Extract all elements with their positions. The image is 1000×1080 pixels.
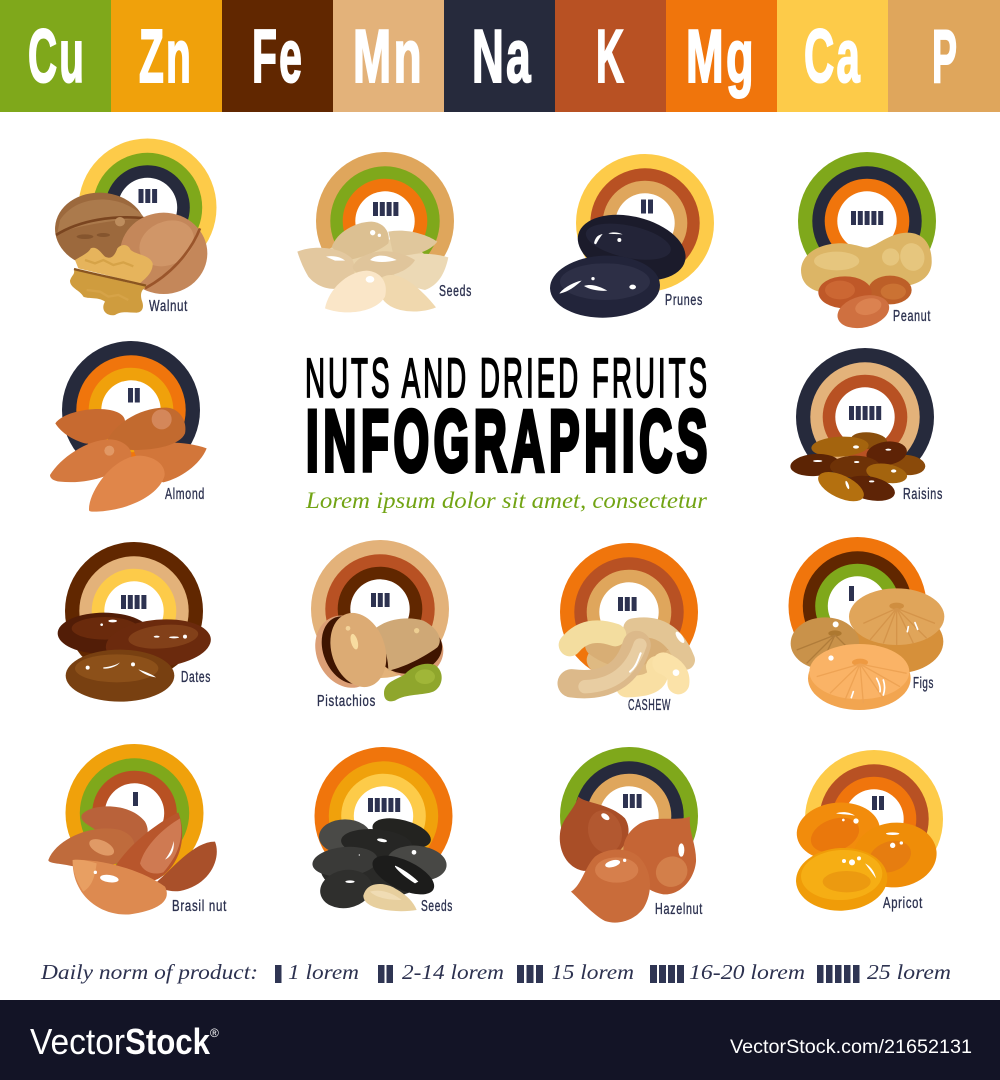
legend item: 16-20 lorem: 16-20 lorem — [689, 960, 805, 984]
daily norm bars: seeds — [373, 202, 398, 216]
label: pistachios: Pistachios — [317, 693, 376, 710]
element: Zn — [111, 0, 222, 112]
daily norm bars: sunflower seeds — [368, 798, 400, 812]
panel: almond — [50, 341, 207, 512]
daily norm bars: raisins — [849, 406, 881, 420]
panel: raisins — [790, 348, 943, 507]
icon: dates — [58, 613, 213, 702]
icon: sunflower seeds — [311, 813, 448, 912]
label: seeds: Seeds — [421, 898, 453, 915]
element: Ca — [777, 0, 888, 112]
daily norm bars: dates — [121, 595, 146, 609]
panel: prunes — [549, 154, 714, 320]
rings: raisins — [796, 348, 934, 486]
daily norm bars: walnut — [138, 189, 157, 203]
rings: cashew — [560, 543, 698, 681]
daily norm bars: cashew — [618, 597, 637, 611]
element: K — [555, 0, 666, 112]
icon: pistachios — [304, 605, 446, 701]
label: apricot: Apricot — [883, 895, 923, 912]
rings: brasil nut — [66, 744, 204, 882]
rings: walnut — [78, 138, 216, 276]
panel: walnut — [53, 138, 217, 315]
footer logo bold: Stock — [125, 1021, 211, 1062]
legend title: Daily norm of product: — [40, 960, 258, 984]
panel: brasil nut — [48, 744, 227, 915]
panel: pumpkin seeds — [297, 152, 472, 312]
icon: pumpkin seeds — [297, 222, 448, 312]
label: hazelnut: Hazelnut — [655, 901, 703, 918]
label: brasil nut: Brasil nut — [172, 898, 227, 915]
label: peanut: Peanut — [893, 308, 931, 325]
rings: figs — [788, 537, 926, 675]
panel: figs — [788, 537, 944, 710]
footer logo: Vector — [30, 1021, 125, 1062]
label: prunes: Prunes — [665, 292, 703, 309]
label: figs: Figs — [913, 675, 934, 692]
element: Mn — [333, 0, 444, 112]
icon: walnut — [53, 190, 207, 315]
rings: almond — [62, 341, 200, 479]
panel: sunflower seeds — [311, 747, 453, 915]
header: mineral element strip — [0, 0, 1000, 112]
daily norm bars: brasil nut — [133, 792, 138, 806]
rings: dates — [65, 542, 203, 680]
daily norm bars: apricot — [872, 796, 884, 810]
element: Fe: Fe — [252, 14, 304, 98]
label: cashew: CASHEW — [628, 697, 671, 714]
title block — [305, 346, 712, 513]
icon: peanut — [801, 233, 932, 333]
icon: brasil nuts — [48, 806, 217, 915]
legend item: 25 lorem: 25 lorem — [867, 960, 951, 984]
daily norm bars: peanut — [851, 211, 883, 225]
label: dates: Dates — [181, 669, 211, 686]
element: Cu: Cu — [28, 14, 86, 98]
element: Mg: Mg — [686, 14, 756, 98]
rings: hazelnut — [560, 747, 698, 885]
label: almond: Almond — [165, 486, 205, 503]
registered mark: ® — [210, 1026, 219, 1040]
legend item: 2-14 lorem: 2-14 lorem — [402, 960, 504, 984]
element: Cu — [0, 0, 111, 112]
icon: dried apricots — [794, 799, 939, 913]
daily norm bars: pistachios — [371, 593, 390, 607]
panel: hazelnut — [560, 747, 703, 923]
element: P — [888, 0, 1000, 112]
element: Fe — [222, 0, 333, 112]
icon: prunes — [549, 204, 693, 320]
rings: prunes — [576, 154, 714, 292]
element: Mn: Mn — [353, 14, 424, 98]
icon: figs — [791, 588, 944, 710]
icon: almonds — [50, 408, 207, 512]
element: K: K — [596, 14, 626, 98]
label: walnut: Walnut — [149, 298, 188, 315]
label: raisins: Raisins — [903, 486, 943, 503]
element: Zn: Zn — [139, 14, 193, 98]
footer image id: VectorStock.com/21652131 — [730, 1037, 972, 1058]
rings: pistachios — [311, 540, 449, 678]
footer band — [0, 1000, 1000, 1080]
subtitle: Lorem ipsum dolor sit amet, consectetur — [305, 488, 708, 513]
rings: seeds — [316, 152, 454, 290]
element: Na — [444, 0, 555, 112]
element: Mg — [666, 0, 777, 112]
label: seeds: Seeds — [439, 283, 472, 300]
panel: pistachios — [304, 540, 449, 710]
element: P: P — [932, 14, 959, 98]
panel: peanut — [798, 152, 936, 333]
icon: hazelnuts — [560, 797, 696, 923]
panel: dates — [58, 542, 213, 702]
legend item: 15 lorem: 15 lorem — [551, 960, 634, 984]
legend item: 16-20 lorem — [650, 960, 805, 984]
legend item: 1 lorem: 1 lorem — [288, 960, 359, 984]
panel: cashew — [560, 543, 698, 714]
daily norm bars: hazelnut — [623, 794, 642, 808]
legend item: 15 lorem — [517, 960, 634, 984]
legend item: 25 lorem — [817, 960, 951, 984]
daily norm bars: almond — [128, 388, 140, 402]
rings: peanut — [798, 152, 936, 290]
panel: apricot — [794, 750, 943, 913]
icon: cashews — [570, 627, 686, 687]
rings: apricot — [805, 750, 943, 888]
legend: daily norm of product — [40, 960, 951, 984]
element: Na: Na — [472, 14, 533, 98]
icon: raisins — [790, 431, 926, 507]
rings: sunflower seeds — [314, 747, 452, 885]
daily norm bars: figs — [849, 586, 854, 601]
daily norm bars: prunes — [641, 200, 653, 214]
element: Ca: Ca — [804, 14, 862, 98]
